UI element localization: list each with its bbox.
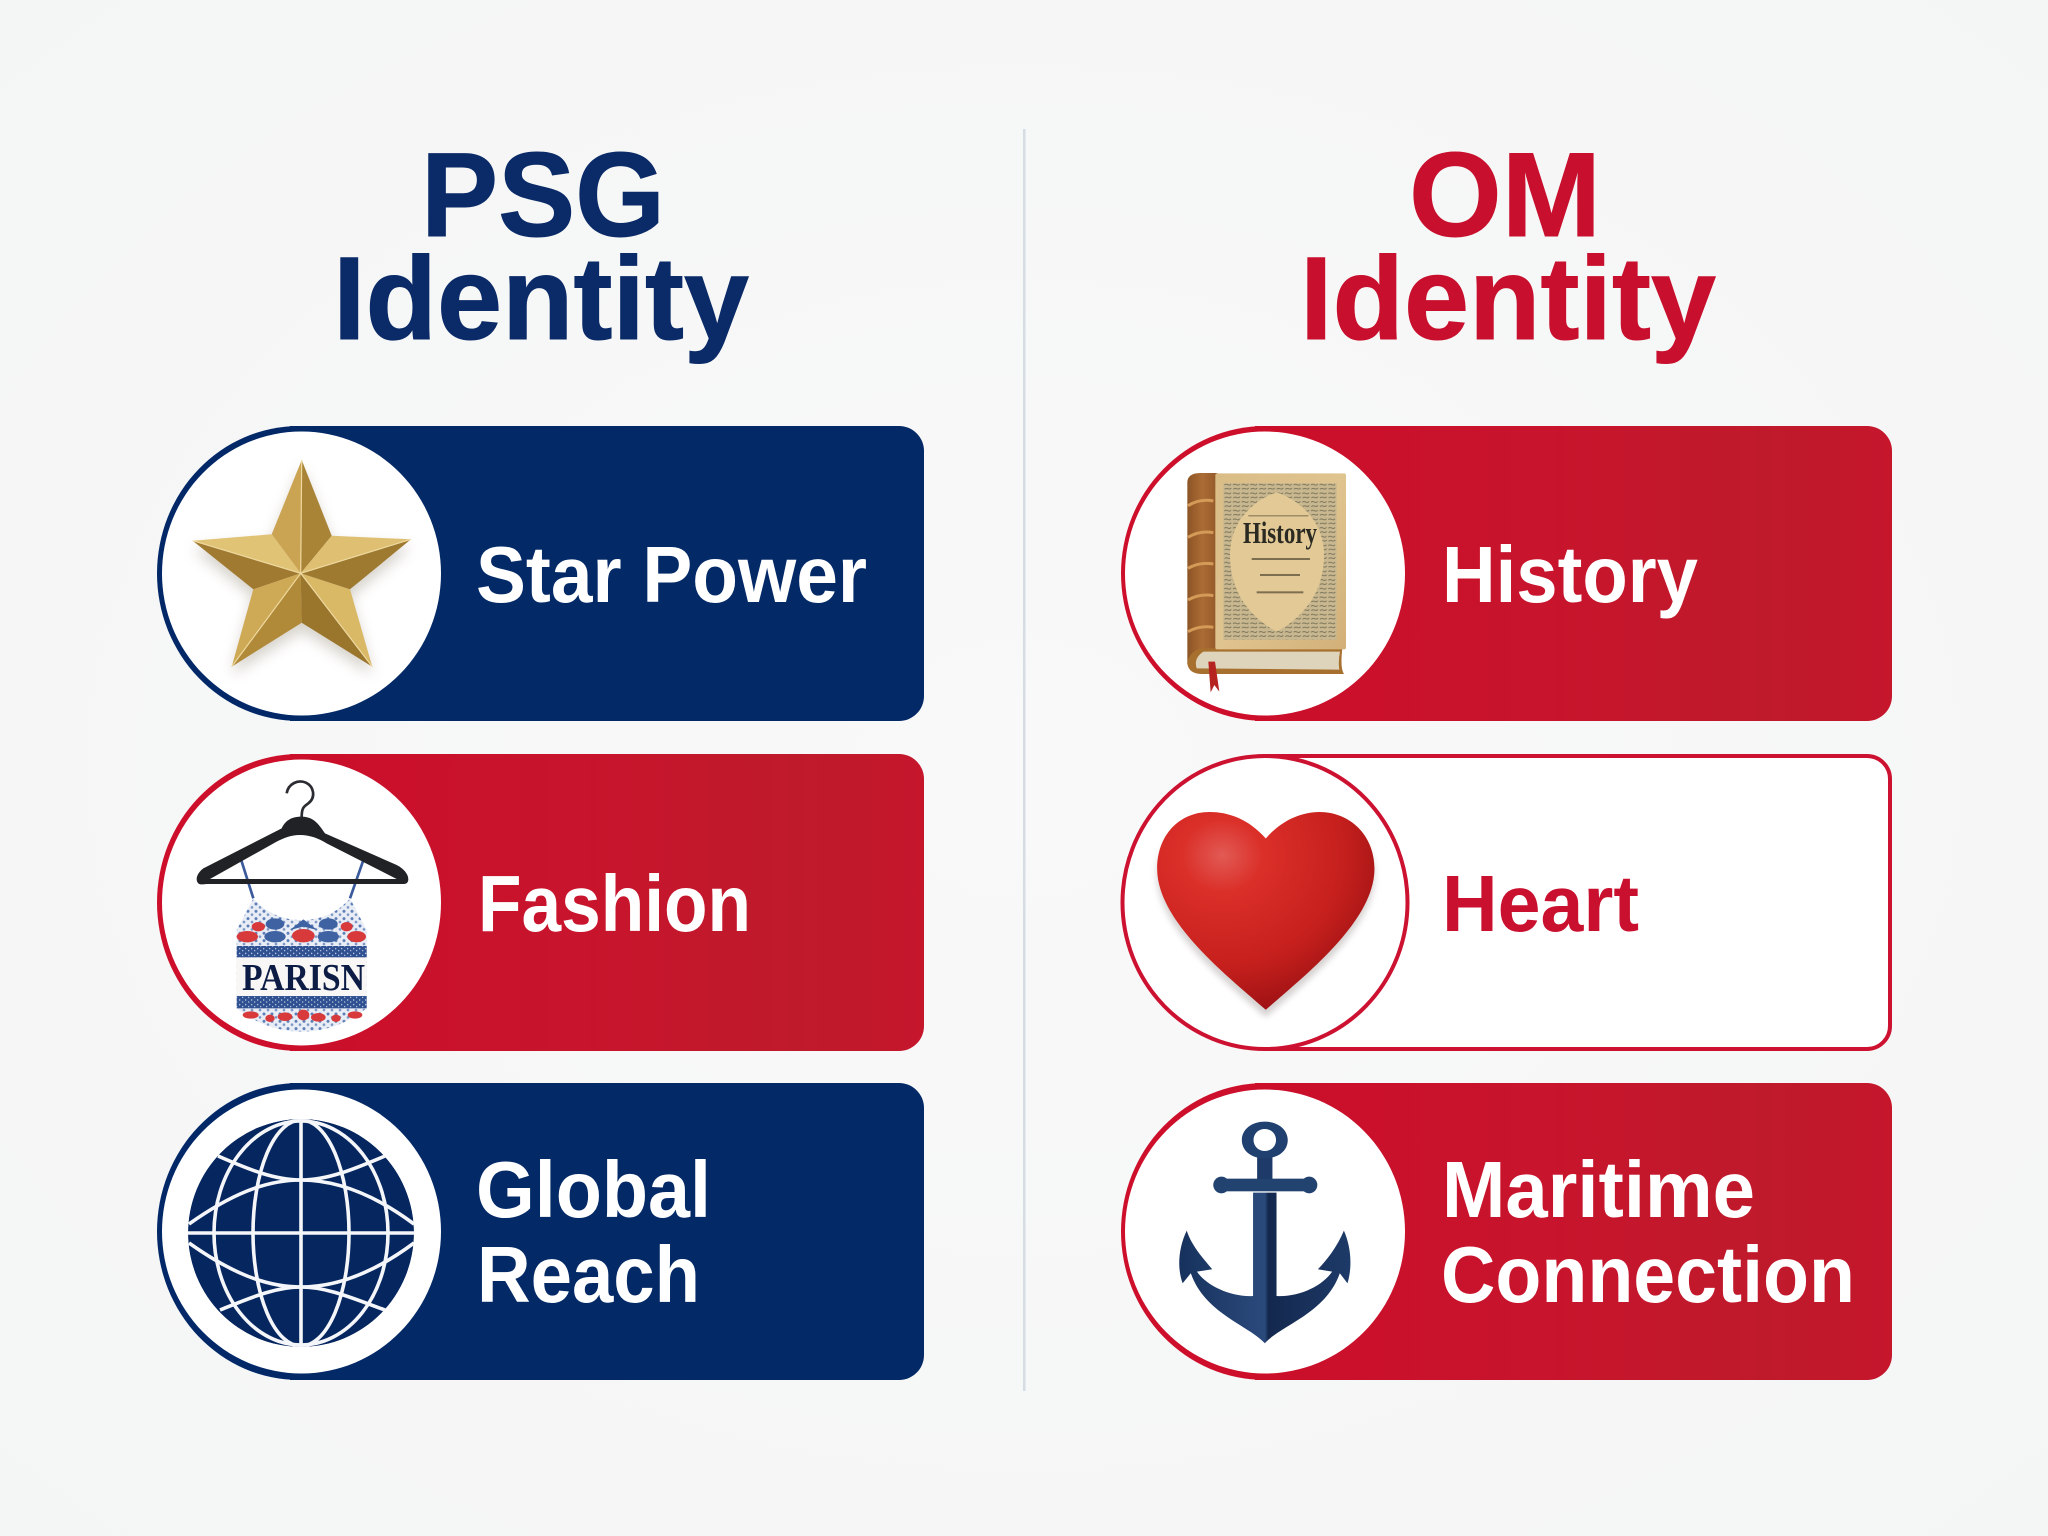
icon: gold star xyxy=(193,460,411,675)
title: OM Identity: Identity xyxy=(1300,233,1716,365)
icon: hanger with PARISN top xyxy=(197,782,408,1032)
title: OM Identity: OM xyxy=(1409,128,1601,262)
label: Star Power: Star Power xyxy=(476,530,867,619)
panel: Heart xyxy=(1122,756,1890,1049)
icon: old book xyxy=(1187,473,1346,692)
icon: red heart xyxy=(1157,812,1374,1017)
label: Global Reach: Global xyxy=(476,1145,711,1234)
panel: Star Power xyxy=(157,426,924,721)
panel: Maritime Connection xyxy=(1121,1083,1892,1380)
icon: globe xyxy=(188,1119,414,1347)
label: Maritime Connection: Connection xyxy=(1441,1230,1855,1319)
icon: hanger with PARISN top: PARISN xyxy=(242,957,365,999)
title: PSG Identity: Identity xyxy=(333,233,749,365)
icon: old book: History xyxy=(1243,515,1317,550)
label: Global Reach xyxy=(476,1145,711,1319)
title: PSG Identity xyxy=(333,128,749,365)
panel: Fashion xyxy=(157,754,924,1051)
panel: Global Reach xyxy=(157,1083,924,1380)
label: Heart: Heart xyxy=(1442,859,1639,948)
panel: History xyxy=(1121,426,1892,721)
title: OM Identity xyxy=(1300,128,1716,365)
label: Maritime Connection: Maritime xyxy=(1442,1145,1755,1234)
label: History: History xyxy=(1442,530,1698,619)
label: Global Reach: Reach xyxy=(477,1230,700,1319)
label: Fashion: Fashion xyxy=(478,859,751,948)
icon: anchor xyxy=(1179,1122,1350,1343)
center divider xyxy=(1023,129,1026,1391)
title: PSG Identity: PSG xyxy=(421,128,665,262)
label: Maritime Connection xyxy=(1441,1145,1855,1319)
